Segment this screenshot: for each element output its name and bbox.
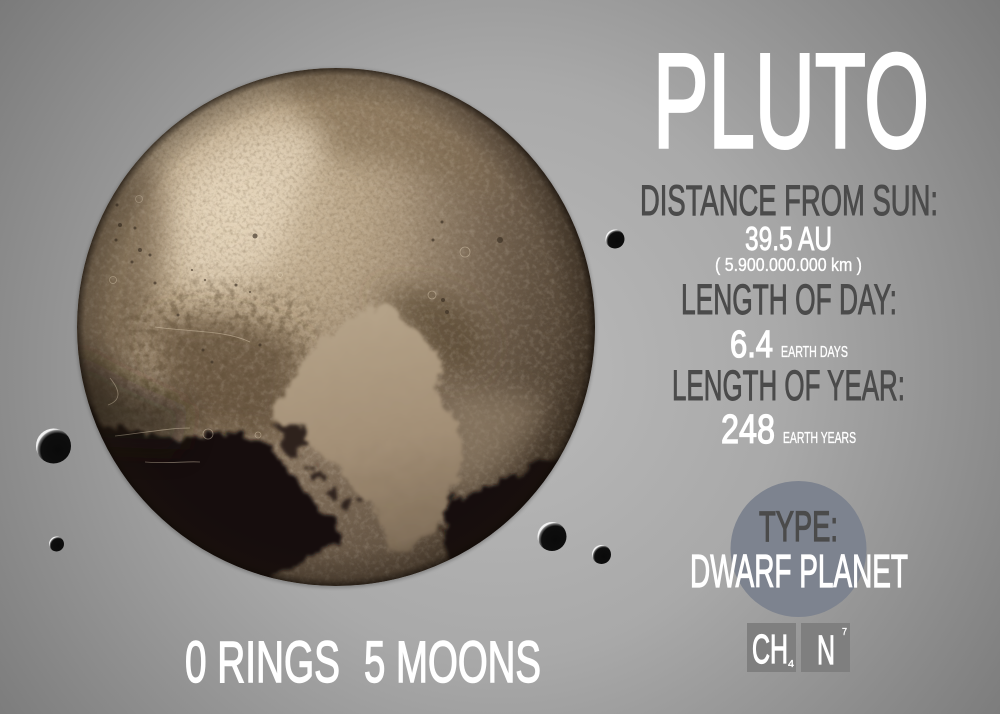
unit: earth days: EARTH DAYS: [781, 344, 848, 361]
dark region: lower left: [88, 402, 344, 578]
rings and moons caption: 0 RINGS: [185, 630, 340, 695]
moon: left large: [36, 428, 71, 464]
moon: lower right large: [538, 522, 566, 551]
dark patch: lower right: [438, 456, 560, 560]
craters: [114, 204, 503, 364]
atmosphere element: N: N: [817, 627, 835, 673]
planet: Pluto: [60, 60, 610, 600]
type heading: TYPE:: [759, 503, 838, 551]
dark blocks on heart edge: [274, 424, 363, 510]
right blend beside heart: [445, 392, 545, 495]
moon: upper right: [606, 230, 624, 248]
atmosphere element: N: [801, 623, 850, 673]
rings and moons caption: [185, 630, 541, 695]
atmosphere element: N: 7: [842, 627, 847, 638]
atmosphere element: CH4: 4: [788, 659, 794, 670]
heart-shaped plain: [275, 307, 465, 552]
type circle: [730, 481, 866, 617]
atmosphere element: CH4: [747, 623, 796, 672]
moon: lower right small: [592, 545, 611, 564]
value: distance in AU: 39.5 AU: [745, 220, 832, 257]
unit: earth years: EARTH YEARS: [783, 430, 856, 447]
value: distance in km: ( 5.900.000.000 km ): [715, 255, 862, 275]
moon: left small: [49, 536, 64, 552]
rings and moons caption: 5 MOONS: [364, 630, 541, 695]
value: length of day: 6.4: [730, 324, 773, 366]
stats block: [640, 177, 938, 452]
value: length of year: 248: [721, 406, 775, 452]
atmosphere element: CH4: CH: [752, 626, 788, 672]
